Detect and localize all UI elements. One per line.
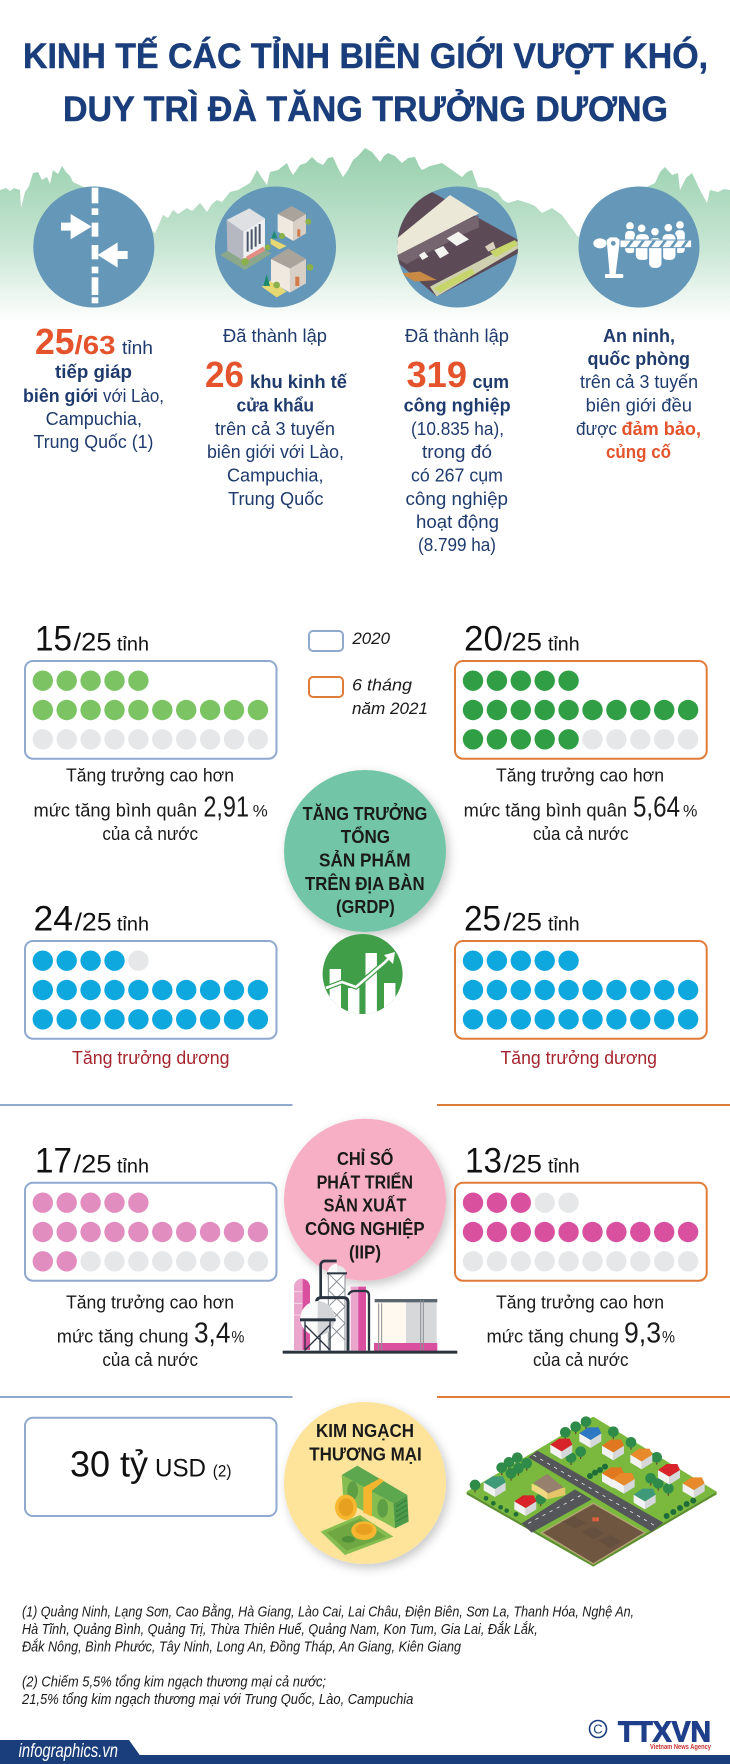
logo: TTXVN: TTXVN bbox=[618, 1717, 711, 1749]
heading: IIP oval: (IIP) bbox=[349, 1242, 381, 1262]
text block: 26 border gate economic zones: Đã thành lập bbox=[223, 326, 327, 346]
text block: 319 industrial clusters: hoạt động bbox=[416, 512, 499, 532]
panel: GRDP higher growth first half 2021: 5,64 bbox=[633, 792, 680, 824]
title: KINH TẾ CÁC TỈNH BIÊN GIỚI VƯỢT KHÓ, bbox=[23, 36, 708, 76]
icon: factory bbox=[283, 1261, 457, 1354]
icon: growth chart bbox=[323, 934, 403, 1015]
panel: GRDP higher growth first half 2021: Tăng trưởng cao hơn bbox=[496, 766, 664, 786]
panel: trade value bbox=[25, 1418, 276, 1516]
panel: IIP first half 2021: 13 bbox=[465, 1141, 502, 1180]
panel: IIP 2020: /25 bbox=[74, 1150, 112, 1178]
title: DUY TRÌ ĐÀ TĂNG TRƯỞNG DƯƠNG bbox=[63, 89, 668, 129]
heading: GRDP growth oval: (GRDP) bbox=[336, 897, 395, 917]
heading: trade turnover circle: THƯƠNG MẠI bbox=[309, 1445, 422, 1465]
panel: GRDP positive growth 2020: tỉnh bbox=[117, 915, 149, 936]
panel: GRDP higher growth first half 2021: của cả nước bbox=[533, 824, 628, 844]
footer bar bbox=[0, 1740, 730, 1764]
panel: GRDP higher growth first half 2021: 20 bbox=[464, 620, 503, 659]
panel: IIP first half 2021 bbox=[455, 1141, 707, 1370]
text block: 26 border gate economic zones: Campuchia, bbox=[227, 466, 324, 486]
icon: money stack bbox=[321, 1466, 409, 1555]
icon: barrier and people bbox=[578, 186, 700, 308]
footnotes: Hà Tĩnh, Quảng Bình, Quảng Trị, Thừa Thiên Huế, Quảng Nam, Kon Tum, Gia Lai, Đắk Lắk, bbox=[22, 1621, 538, 1638]
footnotes: 21,5% tổng kim ngạch thương mại với Trung Quốc, Lào, Campuchia bbox=[21, 1691, 413, 1708]
panel: GRDP higher growth 2020: /25 bbox=[74, 629, 112, 657]
panel: IIP 2020: tỉnh bbox=[117, 1156, 149, 1177]
text block: 319 industrial clusters: (10.835 ha), bbox=[411, 419, 504, 439]
panel: GRDP positive growth 2020: 24 bbox=[34, 900, 73, 939]
panel: GRDP positive growth first half 2021: tỉnh bbox=[548, 915, 580, 936]
text block: 319 industrial clusters: (8.799 ha) bbox=[418, 535, 496, 555]
text block: 319 industrial clusters: 319 bbox=[406, 354, 467, 395]
panel: GRDP positive growth first half 2021: Tăng trưởng dương bbox=[500, 1048, 657, 1068]
heading: GRDP growth oval bbox=[284, 770, 446, 932]
icon: border crossing bbox=[33, 186, 154, 308]
panel: trade value: USD bbox=[155, 1455, 206, 1483]
text block: 319 industrial clusters: trong đó bbox=[422, 442, 492, 462]
panel: IIP first half 2021: tỉnh bbox=[548, 1156, 580, 1177]
text block: 26 border gate economic zones: biên giới với Lào, bbox=[207, 442, 344, 462]
text block: security and defence: được bbox=[576, 419, 617, 439]
text block: 319 industrial clusters: có 267 cụm bbox=[411, 466, 503, 486]
footnotes: (2) Chiếm 5,5% tổng kim ngạch thương mại cả nước; bbox=[22, 1674, 326, 1691]
text block: 319 industrial clusters bbox=[404, 326, 511, 555]
text block: 25/63 provinces: với Lào, bbox=[103, 386, 164, 406]
panel: GRDP higher growth 2020 bbox=[25, 620, 276, 844]
panel: GRDP positive growth 2020: /25 bbox=[74, 909, 112, 937]
legend: 2020 bbox=[351, 629, 391, 648]
panel: IIP first half 2021: mức tăng chung bbox=[486, 1327, 619, 1347]
text block: security and defence bbox=[576, 326, 701, 462]
text block: security and defence: đảm bảo, bbox=[622, 419, 701, 439]
panel: IIP 2020: 17 bbox=[35, 1141, 72, 1180]
panel: GRDP positive growth 2020 bbox=[25, 900, 276, 1068]
heading: GRDP growth oval: TRÊN ĐỊA BÀN bbox=[305, 873, 425, 894]
panel: IIP 2020: 3,4 bbox=[194, 1318, 230, 1350]
panel: GRDP higher growth first half 2021 bbox=[455, 620, 707, 844]
footer bar: infographics.vn bbox=[19, 1741, 118, 1762]
panel: IIP 2020: % bbox=[231, 1328, 244, 1347]
panel: GRDP higher growth 2020: của cả nước bbox=[102, 824, 198, 844]
panel: trade value: (2) bbox=[213, 1462, 231, 1481]
panel: GRDP higher growth 2020: Tăng trưởng cao hơn bbox=[66, 766, 234, 786]
heading: trade turnover circle: KIM NGẠCH bbox=[316, 1421, 414, 1441]
panel: GRDP positive growth 2020: Tăng trưởng dương bbox=[72, 1048, 230, 1068]
footnotes: Đắk Nông, Bình Phước, Tây Ninh, Long An, Đồng Tháp, An Giang, Kiên Giang bbox=[22, 1639, 462, 1656]
text block: 26 border gate economic zones: trên cả 3 tuyến bbox=[215, 419, 335, 439]
heading: GRDP growth oval: TĂNG TRƯỞNG bbox=[303, 803, 427, 824]
legend bbox=[309, 629, 428, 718]
text block: security and defence: củng cố bbox=[606, 442, 671, 462]
panel: GRDP higher growth 2020: mức tăng bình quân bbox=[34, 801, 197, 821]
heading: GRDP growth oval: SẢN PHẨM bbox=[319, 850, 411, 871]
icon: industrial cluster warehouse bbox=[395, 186, 518, 308]
legend: năm 2021 bbox=[352, 699, 428, 718]
panel: GRDP positive growth first half 2021: 25 bbox=[464, 900, 501, 939]
text block: 26 border gate economic zones: Trung Quốc bbox=[228, 489, 324, 509]
text block: security and defence: trên cả 3 tuyến bbox=[580, 372, 698, 392]
panel: IIP 2020: mức tăng chung bbox=[57, 1327, 188, 1347]
heading: trade turnover circle bbox=[284, 1402, 446, 1564]
text block: 26 border gate economic zones: cửa khẩu bbox=[236, 396, 314, 416]
text block: 25/63 provinces: biên giới bbox=[23, 386, 98, 406]
text block: security and defence: An ninh, bbox=[603, 326, 675, 346]
panel: GRDP higher growth first half 2021: mức tăng bình quân bbox=[464, 801, 627, 821]
panel: GRDP higher growth first half 2021: /25 bbox=[504, 629, 542, 657]
text block: 25/63 provinces bbox=[23, 321, 164, 452]
heading: IIP oval: CHỈ SỐ bbox=[337, 1148, 393, 1169]
legend: 6 tháng bbox=[352, 676, 413, 695]
text block: 319 industrial clusters: công nghiệp bbox=[404, 396, 511, 416]
text block: 25/63 provinces: 25 bbox=[35, 321, 74, 362]
text block: 26 border gate economic zones bbox=[205, 326, 348, 509]
text block: 25/63 provinces: tiếp giáp bbox=[55, 362, 132, 382]
illustration: village map bbox=[467, 1416, 717, 1567]
heading: GRDP growth oval: TỔNG bbox=[341, 826, 390, 847]
panel: IIP first half 2021: /25 bbox=[504, 1150, 542, 1178]
panel: IIP first half 2021: Tăng trưởng cao hơn bbox=[496, 1292, 664, 1312]
heading: IIP oval: CÔNG NGHIỆP bbox=[305, 1218, 425, 1239]
panel: IIP first half 2021: % bbox=[662, 1328, 675, 1347]
panel: GRDP higher growth first half 2021: tỉnh bbox=[548, 635, 580, 656]
panel: GRDP higher growth 2020: % bbox=[253, 802, 268, 821]
panel: IIP first half 2021: 9,3 bbox=[624, 1318, 661, 1350]
panel: GRDP positive growth first half 2021 bbox=[455, 900, 707, 1068]
text block: 25/63 provinces: Trung Quốc (1) bbox=[34, 432, 154, 452]
heading: IIP oval: PHÁT TRIỂN bbox=[317, 1171, 413, 1192]
panel: IIP 2020 bbox=[25, 1141, 276, 1370]
footnotes bbox=[21, 1604, 634, 1708]
text block: 25/63 provinces: /63 bbox=[74, 330, 116, 360]
panel: trade value: 30 tỷ bbox=[70, 1444, 148, 1485]
panel: IIP 2020: của cả nước bbox=[102, 1350, 198, 1370]
text block: 319 industrial clusters: công nghiệp bbox=[406, 489, 508, 509]
panel: GRDP higher growth 2020: tỉnh bbox=[117, 635, 149, 656]
icon: border economic zone buildings bbox=[215, 186, 336, 308]
text block: 319 industrial clusters: cụm bbox=[472, 372, 509, 392]
panel: IIP 2020: Tăng trưởng cao hơn bbox=[66, 1292, 234, 1312]
panel: GRDP higher growth 2020: 2,91 bbox=[203, 792, 249, 824]
panel: GRDP higher growth 2020: 15 bbox=[35, 620, 72, 659]
panel: IIP first half 2021: của cả nước bbox=[533, 1350, 628, 1370]
text block: 25/63 provinces: Campuchia, bbox=[46, 409, 142, 429]
text block: security and defence: biên giới đều bbox=[586, 396, 692, 416]
panel: GRDP higher growth first half 2021: % bbox=[683, 802, 697, 821]
logo: TTXVN: Vietnam News Agency bbox=[650, 1744, 711, 1751]
text block: 25/63 provinces: tỉnh bbox=[122, 338, 153, 358]
text block: 319 industrial clusters: Đã thành lập bbox=[405, 326, 509, 346]
forest silhouette background bbox=[0, 148, 730, 322]
panel: GRDP positive growth first half 2021: /25 bbox=[504, 909, 542, 937]
title bbox=[23, 36, 708, 129]
heading: IIP oval: SẢN XUẤT bbox=[324, 1195, 406, 1216]
text block: 26 border gate economic zones: khu kinh tế bbox=[250, 372, 348, 392]
text block: security and defence: quốc phòng bbox=[588, 349, 690, 369]
heading: IIP oval bbox=[284, 1119, 446, 1281]
text block: 26 border gate economic zones: 26 bbox=[205, 354, 244, 395]
logo: TTXVN: C bbox=[593, 1722, 603, 1737]
